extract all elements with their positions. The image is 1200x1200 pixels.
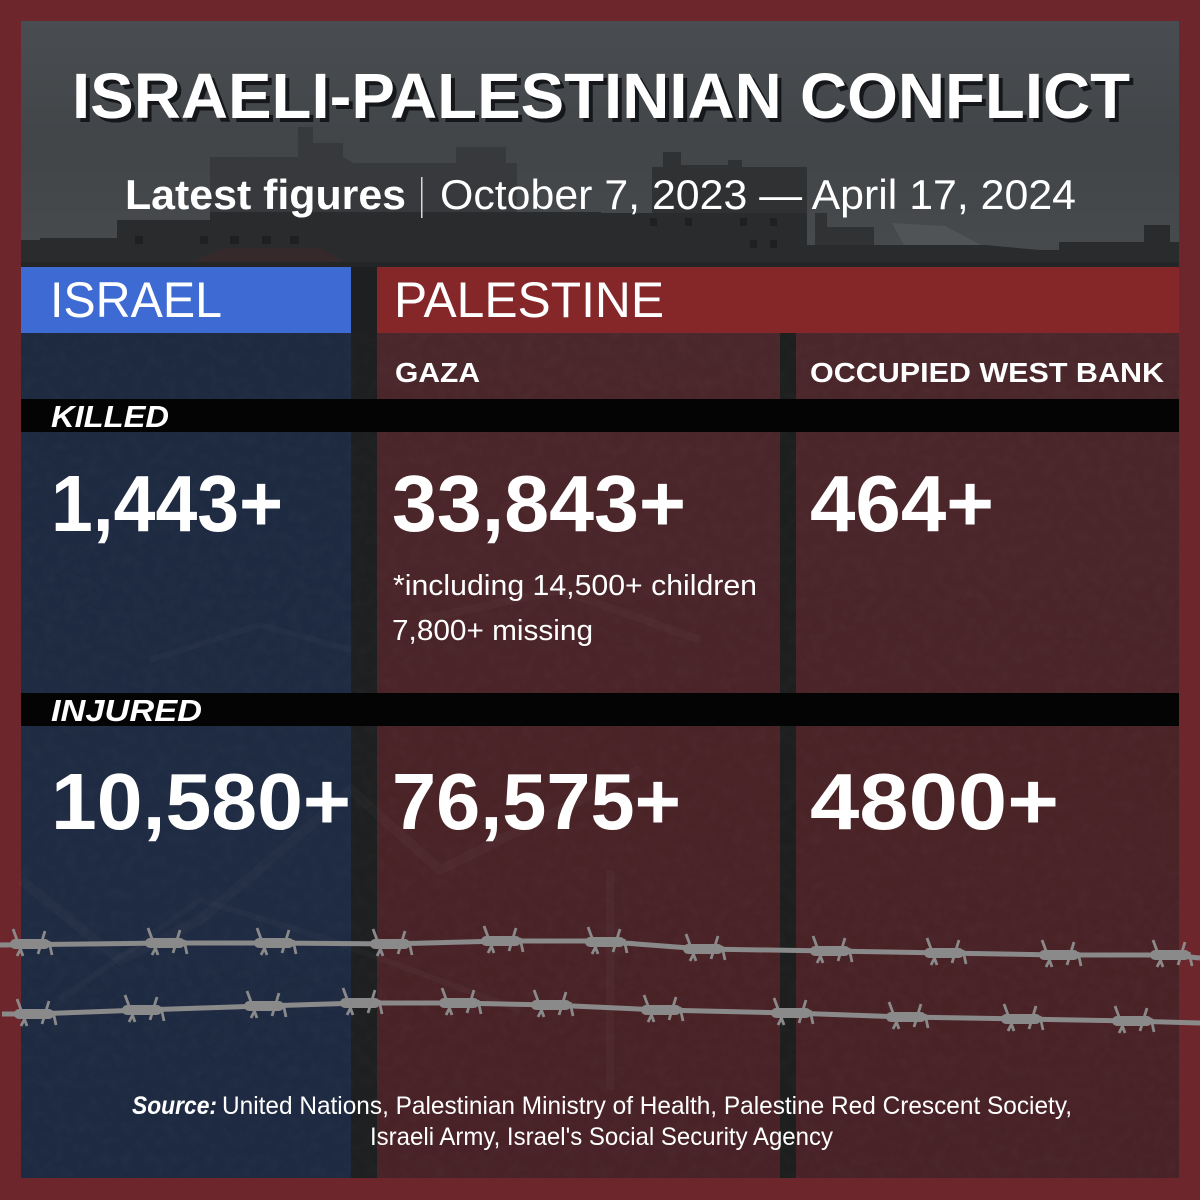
band: injured [21,693,1179,728]
panel: Israel column [21,333,351,1178]
heading: Palestine [377,267,1179,333]
stat: Israel injured: 10,580+ [51,757,351,846]
band: injured: INJURED [51,693,202,728]
stat: Gaza injured: 76,575+ [392,757,681,846]
barbed wire: lower strand [2,988,1200,1033]
subheading: Occupied West Bank: OCCUPIED WEST BANK [810,357,1164,388]
panel: West Bank column [796,333,1179,1178]
header photo panel [21,21,1179,267]
photo texture over columns [21,333,1179,1178]
photo detail over columns [21,590,700,1090]
subtitle: Latest figures [125,171,406,218]
panel: Gaza column [377,333,780,1178]
subtitle: October 7, 2023 — April 17, 2024 [440,171,1076,218]
heading: Palestine: PALESTINE [394,272,664,328]
heading: Israel: ISRAEL [50,272,222,328]
source note [132,1092,1072,1151]
title: ISRAELI-PALESTINIAN CONFLICT [76,64,1134,136]
title: ISRAELI-PALESTINIAN CONFLICT [72,60,1130,132]
stat: Israel killed: 1,443+ [51,459,283,548]
subtitle [125,171,1076,218]
band: killed [21,399,1179,434]
stat: West Bank killed: 464+ [810,459,994,548]
note: Gaza children and missing: 7,800+ missing [392,615,593,647]
heading: Israel [21,267,351,333]
source note: Source: [132,1092,217,1120]
note: Gaza children and missing [392,570,757,647]
stat: Gaza killed: 33,843+ [392,459,686,548]
subheading: Gaza: GAZA [395,357,480,388]
stat: West Bank injured: 4800+ [810,757,1059,846]
source note: Israeli Army, Israel's Social Security Agency [370,1123,833,1151]
band: killed: KILLED [51,399,169,434]
barbed wire: upper strand [0,926,1200,967]
dark gutters between columns [351,267,796,1178]
note: Gaza children and missing: *including 14,500+ children [393,570,757,602]
source note: United Nations, Palestinian Ministry of Health, Palestine Red Crescent Society, [222,1092,1072,1120]
